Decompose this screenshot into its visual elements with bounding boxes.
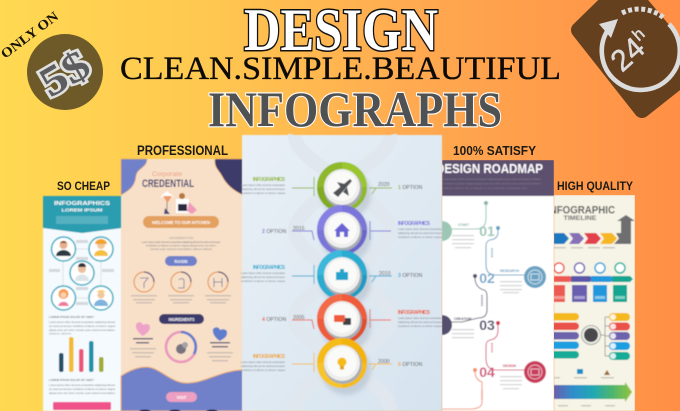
text block 1: LOREM IPSUM DOLOR SIT AMET bbox=[49, 315, 94, 319]
pin row bbox=[554, 263, 625, 273]
text block 1: aliqua enim ad minim veniam quis nostrud exercitation bbox=[49, 328, 115, 332]
step labels: DESIGN bbox=[503, 364, 517, 368]
icon captions bbox=[131, 295, 231, 304]
text: option 4: Lorem ipsum dolor sit amet consectetur bbox=[398, 316, 442, 320]
route ticks bbox=[482, 248, 492, 400]
icon: home bbox=[334, 223, 350, 237]
left top blob bbox=[121, 159, 147, 195]
step: green plane bbox=[317, 162, 371, 219]
credential: CREDENTIAL bbox=[142, 178, 194, 190]
node: start bbox=[442, 220, 452, 242]
blue heart bbox=[213, 327, 227, 341]
panel: timeline infographic bbox=[545, 195, 635, 411]
text: option 4: 4 OPTION bbox=[262, 317, 286, 323]
text: option 3: INFOGRAPHICS bbox=[253, 265, 286, 271]
intro text: veniam quis nostrud exercitation ullamco laboris bbox=[150, 247, 213, 251]
icon: bulb bbox=[338, 358, 346, 370]
header body: ullamco laboris nisi ut aliquip ex ea commodo consequat duis bbox=[443, 186, 528, 190]
text block 1: do eiusmod tempor incididunt ut labore et dolore magna bbox=[49, 324, 115, 328]
icon ring 2 bbox=[171, 272, 191, 292]
clock arrowhead bbox=[599, 19, 618, 38]
person 1 bbox=[52, 237, 76, 261]
route 4 bbox=[486, 321, 526, 370]
24h text: 24 bbox=[605, 31, 651, 78]
text: option 5: INFOGRAPHICS bbox=[253, 354, 286, 360]
icon: plane bbox=[333, 179, 352, 197]
text: option 4: incididunt ut labore et dolore magna bbox=[398, 324, 442, 328]
small icons bbox=[554, 369, 614, 378]
text: option 1 bbox=[241, 177, 422, 195]
text: option 3: 3 OPTION bbox=[398, 273, 422, 279]
text: option 1: INFOGRAPHICS bbox=[253, 177, 286, 183]
connector strokes bbox=[292, 177, 392, 372]
background waves bbox=[295, 135, 390, 411]
text: option 2: 2 OPTION bbox=[262, 229, 286, 235]
ingredients pill: INGREDIENTS bbox=[168, 317, 195, 322]
panel background bbox=[242, 135, 442, 411]
icon: chat bbox=[334, 315, 351, 325]
text block 2: do eiusmod tempor incididunt ut labore et dolore magna bbox=[49, 387, 115, 391]
text block 1 bbox=[49, 315, 115, 336]
panel background bbox=[442, 195, 554, 411]
text: option 2: incididunt ut labore et dolore magna bbox=[398, 235, 442, 239]
text: option 1: adipiscing elit sed do eiusmod tempor bbox=[241, 187, 285, 191]
header body bbox=[443, 178, 541, 190]
ingredient ring bbox=[166, 332, 196, 362]
person 4 bbox=[52, 286, 76, 310]
route 5 bbox=[442, 368, 482, 409]
route 3 bbox=[450, 274, 488, 323]
central hub bbox=[582, 326, 600, 344]
header body: ut labore et dolore magna aliqua enim ad minim veniam quis nostrud exercitation bbox=[443, 182, 541, 186]
panel: roadmap bbox=[432, 160, 554, 411]
text block 2: LOREM IPSUM DOLOR SIT AMET bbox=[49, 378, 94, 382]
panel background bbox=[121, 159, 243, 411]
title: infographs: INFOGRAPHS bbox=[208, 81, 502, 137]
pink button bbox=[53, 402, 111, 410]
text block 2: aliqua enim ad minim veniam quis nostrud exercitation bbox=[49, 391, 115, 395]
text: option 5 bbox=[241, 354, 422, 372]
text: option 3: incididunt ut labore et dolore magna bbox=[241, 279, 285, 283]
welcome pill: WELCOME TO OUR KITCHEN bbox=[152, 220, 211, 225]
text: option 3: adipiscing elit sed do eiusmod tempor bbox=[241, 275, 285, 279]
step labels: START bbox=[458, 223, 470, 227]
text: option 4: INFOGRAPHICS bbox=[398, 310, 431, 316]
intro text: INFORMATION bbox=[169, 236, 193, 240]
timeline subtitle: TIMELINE bbox=[564, 215, 597, 222]
clock ring bbox=[602, 24, 680, 90]
step 01: 01 bbox=[479, 223, 495, 239]
node: design bbox=[524, 361, 546, 383]
badge: 24h delivery bbox=[579, 0, 680, 110]
panel: people infographic bbox=[43, 196, 122, 411]
raisin pill bbox=[165, 256, 197, 266]
visit pill: VISIT bbox=[176, 395, 187, 400]
step 03: 03 bbox=[479, 317, 495, 333]
price circle bbox=[27, 34, 103, 110]
label: so cheap: SO CHEAP bbox=[57, 181, 110, 193]
text: option 2: 2015 bbox=[293, 226, 305, 232]
text: option 2: adipiscing elit sed do eiusmod tempor bbox=[398, 231, 442, 235]
text: option 1: Lorem ipsum dolor sit amet consectetur bbox=[241, 183, 285, 187]
icon: briefcase bbox=[336, 269, 348, 280]
right pills bbox=[609, 313, 630, 360]
subtitle: clean simple beautiful: CLEAN.SIMPLE.BEAUTIFUL bbox=[120, 51, 561, 87]
step: purple home bbox=[317, 205, 371, 262]
visit pill bbox=[166, 392, 197, 402]
header subtitle: LOREM IPSUM bbox=[62, 208, 103, 212]
bottom captions bbox=[558, 405, 615, 406]
bottom avatars bbox=[139, 410, 218, 411]
bottom arrow band bbox=[554, 382, 632, 402]
left pills bbox=[554, 312, 580, 360]
ribbon row bbox=[554, 276, 633, 282]
intro text: Lorem ipsum dolor sit amet consectetur adipiscing elit sed do eiusmod tempor bbox=[142, 240, 221, 244]
brown rounded diamond bbox=[579, 0, 680, 110]
text: option 3: 2010 bbox=[379, 271, 391, 277]
people captions bbox=[49, 240, 114, 305]
arrow row bbox=[554, 215, 635, 244]
text block 2: Lorem ipsum dolor sit amet consectetur adipiscing elit sed bbox=[49, 383, 115, 387]
text: option 4: adipiscing elit sed do eiusmod tempor bbox=[398, 320, 442, 324]
24h text: h bbox=[629, 24, 648, 45]
label: professional: PROFESSIONAL bbox=[137, 143, 228, 158]
text block 1: ullamco laboris bbox=[49, 332, 72, 336]
card row bbox=[554, 285, 627, 302]
year labels bbox=[554, 247, 615, 248]
badge: only on 5$ bbox=[0, 8, 103, 110]
raisin pill: RAISIN bbox=[174, 259, 188, 264]
step 02: 02 bbox=[479, 270, 495, 286]
route 2 bbox=[486, 226, 526, 275]
route 1 bbox=[451, 200, 488, 230]
header body bbox=[56, 216, 108, 224]
text: option 4 bbox=[262, 310, 442, 328]
welcome pill bbox=[143, 216, 219, 228]
ingredients pill bbox=[159, 314, 204, 324]
label: high quality: HIGH QUALITY bbox=[557, 179, 633, 193]
step labels bbox=[454, 223, 520, 368]
text: option 4: 2005 bbox=[293, 315, 305, 321]
label: 100% satisfy: 100% SATISFY bbox=[453, 143, 536, 158]
infographic title: INFOGRAPHIC bbox=[547, 204, 615, 216]
price text: 5$ bbox=[32, 42, 98, 107]
text: option 5: incididunt ut labore et dolore magna bbox=[241, 368, 285, 372]
bottom wave bbox=[121, 367, 243, 411]
panel: five-step circles bbox=[241, 135, 442, 411]
panel: corporate credential bbox=[121, 159, 243, 411]
clock ticks bbox=[622, 9, 664, 18]
ingredient notes bbox=[130, 338, 233, 362]
corporate: Corporate bbox=[152, 171, 182, 178]
panel background bbox=[554, 195, 635, 411]
text: option 3 bbox=[241, 265, 422, 283]
bar chart bbox=[59, 337, 104, 372]
intro text: incididunt ut labore et dolore magna aliqua enim ad minim bbox=[146, 244, 217, 248]
pink heart bbox=[136, 322, 150, 336]
step: blue briefcase bbox=[317, 250, 371, 307]
text: option 1: 2020 bbox=[378, 182, 390, 188]
text: option 5: 5 OPTION bbox=[398, 362, 422, 368]
kitchen illustration bbox=[160, 191, 197, 214]
text block 1: Lorem ipsum dolor sit amet consectetur adipiscing elit sed bbox=[49, 320, 115, 324]
step: red chat bbox=[317, 294, 371, 351]
step labels: CREATION bbox=[454, 317, 472, 321]
header title: INFOGRAPHICS bbox=[54, 201, 110, 207]
person 3 bbox=[70, 261, 94, 285]
hub connectors bbox=[600, 317, 609, 356]
node: creation bbox=[442, 314, 453, 336]
step notes bbox=[452, 235, 522, 389]
person 2 bbox=[89, 237, 113, 261]
teal header bbox=[43, 196, 122, 233]
header body: Lorem ipsum dolor sit amet consectetur adipiscing elit sed do eiusmod tempor incididunt bbox=[443, 177, 541, 181]
person 5 bbox=[89, 286, 113, 310]
text: option 2 bbox=[262, 221, 442, 239]
icon ring 3 bbox=[208, 272, 228, 292]
text: option 5: Lorem ipsum dolor sit amet consectetur bbox=[241, 360, 285, 364]
text: option 2: INFOGRAPHICS bbox=[398, 221, 431, 227]
text: option 5: 2000 bbox=[378, 359, 390, 365]
purple header bbox=[442, 160, 554, 196]
intro text bbox=[142, 236, 221, 251]
panel background bbox=[43, 196, 122, 411]
step 04: 04 bbox=[479, 364, 495, 380]
text: option 3: Lorem ipsum dolor sit amet consectetur bbox=[241, 271, 285, 275]
roadmap title: DESIGN ROADMAP bbox=[436, 161, 543, 176]
step: yellow bulb bbox=[317, 338, 371, 395]
text: option 5: adipiscing elit sed do eiusmod tempor bbox=[241, 364, 285, 368]
text: option 2: Lorem ipsum dolor sit amet consectetur bbox=[398, 227, 442, 231]
node: research bbox=[524, 266, 546, 288]
icon ring 1 bbox=[134, 272, 154, 292]
text: option 1: 1 OPTION bbox=[398, 185, 422, 191]
text block 2 bbox=[49, 378, 115, 395]
step labels: RESEARCH bbox=[500, 269, 520, 273]
text: option 1: incididunt ut labore et dolore magna bbox=[241, 191, 285, 195]
people network bbox=[52, 237, 113, 310]
right top blob bbox=[215, 159, 243, 195]
